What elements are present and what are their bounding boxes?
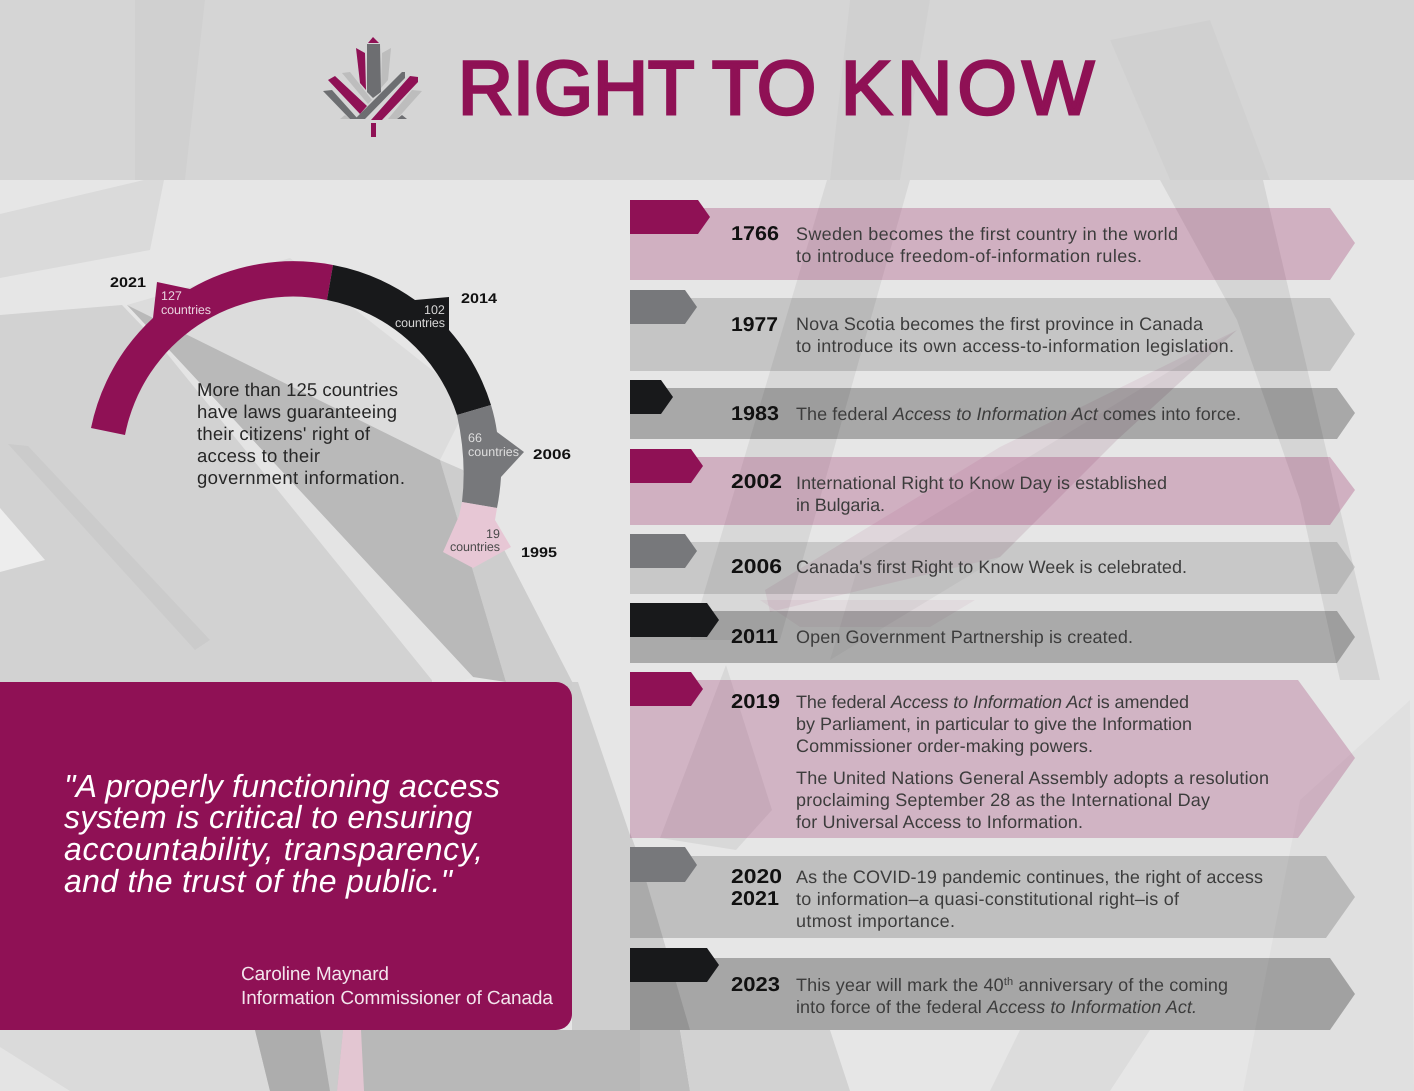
attribution (241, 964, 553, 1009)
title: KNOW (841, 46, 1099, 131)
timeline row: 2002 (630, 449, 1355, 525)
timeline row: 2020 2021 (630, 847, 1355, 938)
timeline row: 1977: Nova Scotia becomes the first province in Canada (796, 314, 1204, 334)
panel: quote (0, 682, 572, 1030)
arc segment: 2014 (327, 265, 491, 415)
timeline row: 2019: Commissioner order-making powers. (796, 736, 1093, 756)
arc segment: 2014: 102 (424, 303, 445, 317)
arc segment: 2014: countries (395, 316, 445, 330)
arc segment: 2006: 66 (468, 431, 482, 445)
timeline row: 2020 2021: 2021 (731, 888, 779, 910)
timeline row: 2023 (630, 948, 1355, 1030)
quote text: accountability, transparency, (64, 831, 483, 867)
arc segment: 1995 (443, 502, 511, 568)
timeline row: 2020 2021: 2020 (731, 866, 782, 888)
quote text: "A properly functioning access (64, 768, 500, 804)
text block: more than 125 countries: government information. (197, 467, 405, 488)
arc segment: 2006: countries (468, 445, 519, 459)
year labels: 1995 (521, 544, 557, 560)
timeline row: 1766: 1766 (731, 223, 779, 245)
year labels: 2014 (461, 290, 497, 306)
timeline row: 1977 (630, 290, 1355, 371)
arc segment: 1995: 19 (486, 527, 500, 541)
timeline row: 1983 (630, 380, 1355, 439)
arc segment: 2021: countries (161, 303, 211, 317)
year labels (110, 274, 571, 560)
timeline row: 2020 2021: utmost importance. (796, 911, 955, 931)
text block: more than 125 countries: have laws guaranteeing (197, 401, 397, 422)
year labels: 2006 (533, 446, 571, 462)
text block: more than 125 countries: their citizens' right of (197, 423, 371, 444)
arc segment: 2021 (91, 261, 333, 435)
timeline row: 1983: The federal Access to Information Act comes into force. (796, 404, 1241, 424)
timeline row: 2019: The federal Access to Information Act is amended (796, 692, 1189, 712)
timeline row: 2020 2021: As the COVID-19 pandemic continues, the right of access (796, 867, 1263, 887)
timeline row: 2019: 2019 (731, 691, 780, 713)
text block: more than 125 countries: access to their (197, 445, 320, 466)
title: RIGHT (458, 46, 693, 131)
title: TO (712, 46, 816, 131)
timeline row: 2019: for Universal Access to Information. (796, 812, 1083, 832)
timeline row: 2023: 2023 (731, 974, 780, 996)
timeline row: 2006: 2006 (731, 556, 782, 578)
chart: countries with access laws arc (91, 261, 571, 568)
timeline row: 2006 (630, 534, 1355, 594)
timeline row: 2011: Open Government Partnership is created. (796, 627, 1133, 647)
text block: more than 125 countries (197, 379, 405, 488)
timeline row: 2002: International Right to Know Day is established (796, 473, 1167, 493)
icon: maple leaf logo (323, 37, 422, 137)
timeline row: 2019 (630, 672, 1355, 838)
timeline row: 1766: to introduce freedom-of-information rules. (796, 246, 1142, 266)
attribution: Information Commissioner of Canada (241, 988, 553, 1009)
timeline row: 2011: 2011 (731, 626, 778, 648)
timeline row: 2002: 2002 (731, 471, 782, 493)
arc segment: 1995: countries (450, 540, 500, 554)
timeline row: 2002: in Bulgaria. (796, 495, 885, 515)
arc segment: 2006 (457, 405, 524, 508)
timeline row: 2023: anniversary of the coming (1013, 975, 1228, 995)
timeline row: 1983: 1983 (731, 403, 779, 425)
timeline row: 2019: by Parliament, in particular to give the Information (796, 714, 1192, 734)
timeline row: 2023: into force of the federal Access to Information Act. (796, 997, 1197, 1017)
quote text (64, 768, 500, 899)
timeline row: 2020 2021: to information–a quasi-constitutional right–is of (796, 889, 1180, 909)
year labels: 2021 (110, 274, 146, 290)
arc segment: 2021: 127 (161, 289, 182, 303)
timeline row: 2023: This year will mark the 40 (796, 975, 1004, 995)
timeline row: 1977: to introduce its own access-to-information legislation. (796, 336, 1234, 356)
text block: more than 125 countries: More than 125 countries (197, 379, 398, 400)
timeline row: 2023: th (1004, 976, 1013, 988)
timeline row: 2019: proclaiming September 28 as the International Day (796, 790, 1210, 810)
timeline row: 2011 (630, 603, 1355, 663)
timeline row: 1977: 1977 (731, 314, 778, 336)
timeline row: 1766: Sweden becomes the first country in the world (796, 224, 1178, 244)
timeline row: 1766 (630, 200, 1355, 280)
quote text: and the trust of the public." (64, 863, 454, 899)
attribution: Caroline Maynard (241, 964, 389, 985)
timeline row: 2019: The United Nations General Assembly adopts a resolution (796, 768, 1269, 788)
timeline row: 2006: Canada's first Right to Know Week is celebrated. (796, 557, 1187, 577)
quote text: system is critical to ensuring (64, 799, 472, 835)
